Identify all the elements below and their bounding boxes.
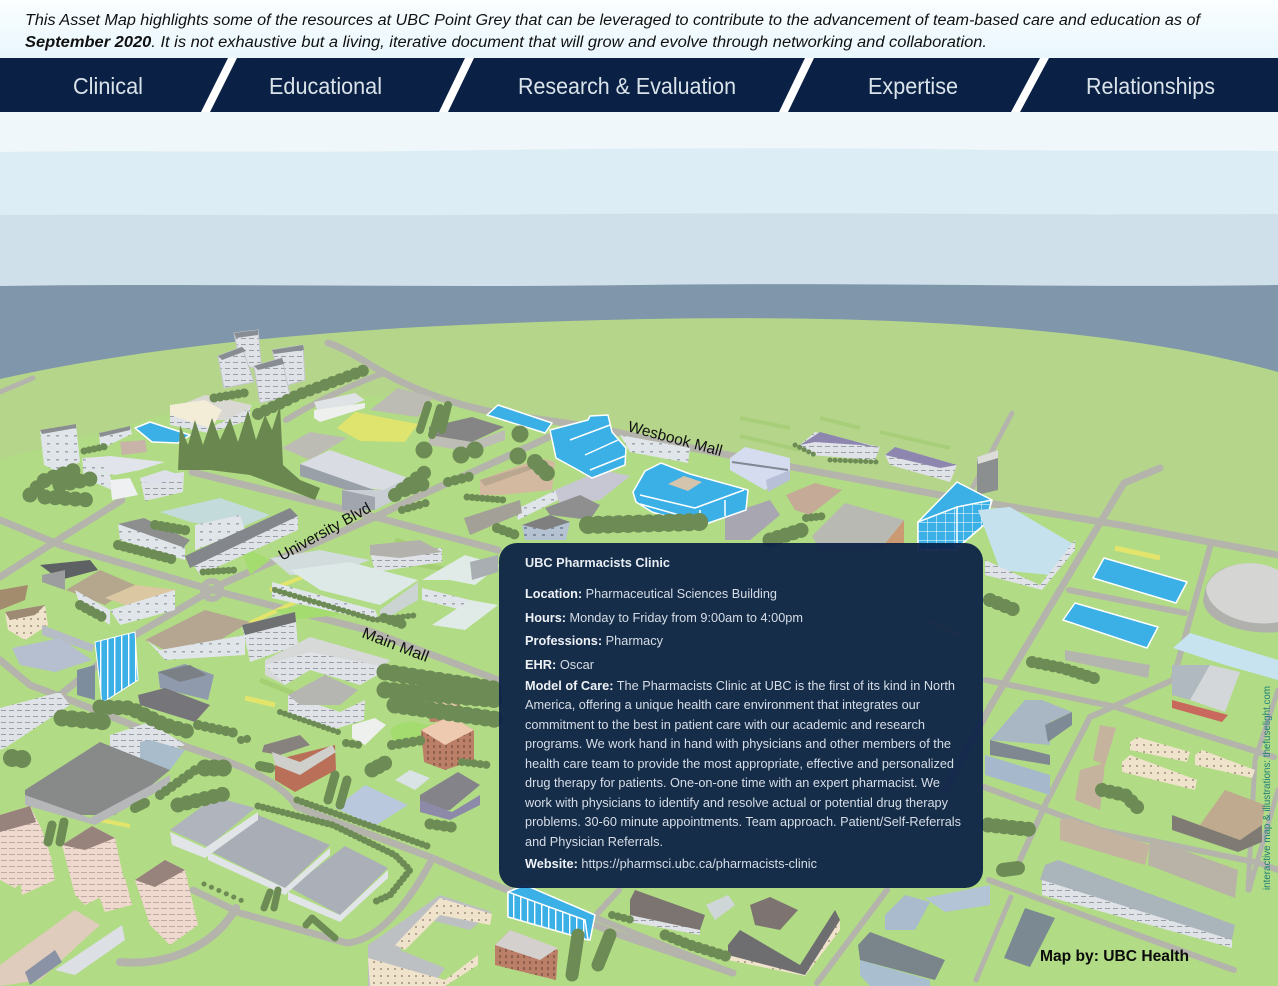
map credit: Map by: UBC Health — [1040, 948, 1189, 965]
blue highlighted buildings: north — [135, 405, 992, 550]
panel details: and Physician Referrals. — [525, 835, 663, 849]
illustrator credit vertical: interactive map & illustrations: thefuselight.com — [1262, 686, 1273, 890]
panel details: commitment to the best in patient care with our academic and research — [525, 718, 925, 732]
panel details: Model of Care: The Pharmacists Clinic at UBC is the first of its kind in North — [525, 679, 955, 693]
panel details — [524, 587, 961, 871]
buildings: north-west cluster — [40, 395, 252, 501]
panel details: problems. 30-60 minute appointments. Team approach. Patient/Self-Referrals — [525, 815, 961, 829]
road label: University Blvd: University Blvd — [276, 500, 374, 564]
navigation bar: Expertise — [868, 73, 958, 99]
navigation bar: Educational — [269, 73, 382, 99]
panel details: Hours: Monday to Friday from 9:00am to 4:00pm — [525, 611, 803, 625]
intro text block — [25, 12, 1202, 51]
buildings: east and south-east — [630, 507, 1278, 986]
intro text block: This Asset Map highlights some of the resources at UBC Point Grey that can be leveraged to contribute to the advancement of team-based care and education as of — [25, 12, 1202, 29]
blue highlighted buildings: east and south — [508, 558, 1187, 940]
navigation bar: Research & Evaluation — [518, 73, 736, 99]
navigation bar — [0, 58, 1278, 112]
road label: Main Mall: Main Mall — [360, 625, 431, 666]
panel details: drug therapy for patients. One-on-one time with an expert pharmacist. We — [525, 776, 940, 790]
buildings: west centre — [0, 498, 500, 672]
panel details: Professions: Pharmacy — [525, 634, 664, 648]
panel details: programs. We work hand in hand with physicians and other members of the — [525, 737, 951, 751]
info panel: UBC Pharmacists Clinic — [499, 543, 983, 888]
road label: Wesbook Mall: Wesbook Mall — [626, 418, 724, 460]
panel details: America, offering a unique health care environment that integrates our — [525, 698, 920, 712]
buildings: south-west residential — [0, 632, 558, 986]
grass patches and yellow fields — [100, 388, 1160, 826]
intro text block: September 2020 . It is not exhaustive but a living, iterative document that will grow and evolve through networking and collaboration. — [25, 34, 987, 51]
roads — [0, 343, 1278, 983]
panel details: EHR: Oscar — [525, 658, 594, 672]
panel title: UBC Pharmacists Clinic — [525, 556, 670, 570]
navigation bar: Clinical — [73, 73, 143, 99]
campus land — [0, 318, 1278, 986]
forest: conifer stand by University Blvd — [178, 405, 320, 500]
panel details: work with physicians to identify and resolve actual or potential drug therapy — [524, 796, 949, 810]
trees — [12, 370, 1138, 975]
panel details: Website: https://pharmsci.ubc.ca/pharmacists-clinic — [525, 857, 817, 871]
navigation bar: Relationships — [1086, 73, 1215, 99]
panel details: health care team to provide the most appropriate, effective and personalized — [525, 757, 954, 771]
buildings: north residential towers — [218, 330, 305, 403]
water — [0, 284, 1278, 400]
buildings: centre north — [300, 393, 998, 550]
panel details: Location: Pharmaceutical Sciences Building — [525, 587, 777, 601]
